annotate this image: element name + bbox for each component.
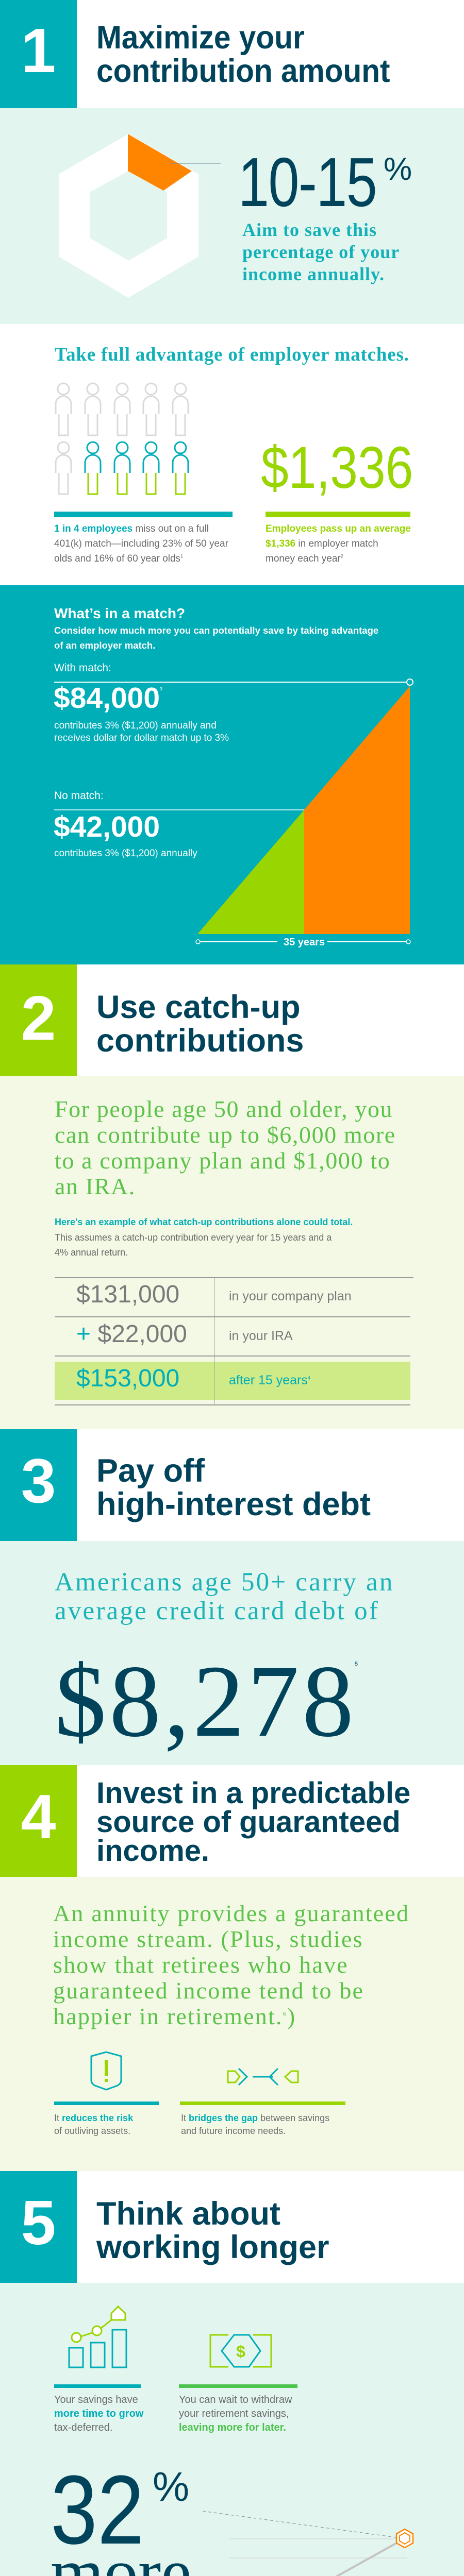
text: no match detail: contributes 3% ($1,200) annually	[54, 848, 197, 859]
panel: 10-15%	[0, 108, 464, 324]
number badge 2: 2	[21, 983, 56, 1053]
text: employees pass up: Employees pass up an average	[266, 523, 411, 534]
row: total: $153,000	[76, 1365, 179, 1392]
text: catch-up intro: an IRA.	[55, 1173, 136, 1199]
text: assumption: 4% annual return.	[55, 1247, 128, 1258]
percent sign: %	[384, 151, 412, 187]
panel: section 5 header	[0, 2171, 329, 2283]
number badge 5: 5	[21, 2188, 56, 2258]
bar: lime	[180, 2102, 345, 2105]
icon: people grid	[55, 382, 189, 495]
text: annuity: income stream. (Plus, studies	[53, 1926, 363, 1952]
subtitle	[54, 625, 378, 651]
text: reduces risk: It reduces the risk	[54, 2113, 133, 2123]
heading: invest: Invest in a predictable	[96, 1776, 410, 1810]
heading: take full advantage: Take full advantage of employer matches.	[55, 344, 409, 365]
row: IRA: + $22,000	[76, 1320, 187, 1348]
bar: teal	[54, 512, 233, 517]
icon: money	[209, 2334, 272, 2368]
text: annuity: An annuity provides a guaranteed	[53, 1900, 409, 1926]
number badge 5	[0, 2171, 77, 2283]
panel: credit card debt	[0, 1541, 464, 1765]
text: employees pass up: money each year2	[266, 553, 343, 564]
text: with match detail	[54, 720, 229, 743]
label: no match: No match:	[54, 790, 104, 802]
text: time to grow	[54, 2394, 143, 2433]
text: time to grow: tax-deferred.	[54, 2422, 112, 2433]
number badge 3: 3	[21, 1446, 56, 1516]
bar: teal	[54, 2102, 159, 2105]
text: wait to withdraw: You can wait to withdraw	[179, 2394, 292, 2405]
panel: section 4 header	[0, 1765, 410, 1877]
heading: catch-up: contributions	[96, 1023, 304, 1059]
text: employees pass up: $1,336 in employer match	[266, 538, 378, 549]
icon: hexagon chart	[59, 134, 221, 298]
text: bridges gap	[181, 2113, 329, 2136]
heading: invest	[96, 1776, 410, 1868]
text: catch-up intro: For people age 50 and older, you	[55, 1096, 393, 1122]
percent sign: %	[153, 2464, 189, 2510]
text: bridges gap: and future income needs.	[181, 2126, 286, 2136]
text: annuity: guaranteed income tend to be	[53, 1977, 364, 2004]
caption: aim to save: income annually.	[242, 264, 385, 284]
text: with match detail: receives dollar for dollar match up to 3%	[54, 733, 229, 743]
value: $42,000: $42,000	[54, 810, 160, 843]
caption: aim to save	[242, 219, 400, 284]
subtitle: Consider how much more you can potentially save by taking advantage	[54, 625, 378, 636]
table: totals	[55, 1277, 413, 1405]
panel: section 1 header	[0, 0, 464, 108]
text: with match detail: contributes 3% ($1,200) annually and	[54, 720, 217, 731]
text: 1 in 4 employees: 401(k) match—including 23% of 50 year	[54, 538, 228, 549]
heading: invest: income.	[96, 1834, 209, 1868]
panel: section 2 header	[0, 964, 304, 1076]
text: bridges gap: It bridges the gap between savings	[181, 2113, 329, 2123]
text: annuity	[53, 1900, 409, 2029]
heading: what's in a match: What’s in a match?	[54, 605, 185, 621]
value: $84,000: $84,0003	[54, 682, 162, 715]
big number $1,336: $1,336	[261, 435, 413, 501]
heading: pay off debt	[96, 1453, 371, 1522]
panel: annuity	[0, 1877, 464, 2171]
number badge 4: 4	[21, 1782, 56, 1852]
text: reduces risk: of outliving assets.	[54, 2126, 130, 2136]
row: company plan: $131,000	[76, 1281, 179, 1308]
text: time to grow: more time to grow	[54, 2408, 143, 2419]
icon: money: $	[236, 2342, 245, 2361]
heading: pay off debt: Pay off	[96, 1453, 205, 1489]
text: wait to withdraw	[179, 2394, 292, 2433]
subtitle: of an employer match.	[54, 640, 155, 651]
heading: maximize: contribution amount	[96, 53, 390, 89]
big number $8,278: $8,278	[55, 1645, 357, 1758]
icon: bridge arrows	[227, 2068, 299, 2086]
number badge 4	[0, 1765, 77, 1877]
chart: match triangle: 35 years	[284, 937, 325, 948]
chart: match triangle	[54, 679, 413, 948]
heading: catch-up: Use catch-up	[96, 989, 301, 1025]
panel: what's in a match	[0, 585, 464, 964]
label: with match: With match:	[54, 662, 111, 674]
text: 1 in 4 employees: 1 in 4 employees miss out on a full	[54, 523, 209, 534]
text: wait to withdraw: leaving more for later.	[179, 2422, 286, 2433]
heading: working longer: Think about	[96, 2196, 280, 2232]
heading: maximize: Maximize your	[96, 20, 305, 56]
text: assumption	[55, 1232, 332, 1258]
table: totals: in your IRA	[229, 1329, 293, 1343]
text: catch-up intro	[55, 1096, 396, 1199]
text: assumption: This assumes a catch-up contribution every year for 15 years and a	[55, 1232, 332, 1243]
icon: growth chart	[68, 2305, 127, 2368]
text: reduces risk	[54, 2113, 133, 2136]
table: totals: in your company plan	[229, 1289, 352, 1303]
heading: catch-up	[96, 989, 304, 1059]
number badge 1	[0, 0, 77, 108]
panel: employer matches	[54, 344, 413, 564]
text: americans age 50+: Americans age 50+ carry an	[55, 1568, 394, 1597]
number badge 3	[0, 1429, 77, 1541]
heading: invest: source of guaranteed	[96, 1805, 401, 1839]
caption: aim to save: Aim to save this	[242, 219, 377, 240]
text: time to grow: Your savings have	[54, 2394, 138, 2405]
footnote 5: 5	[355, 1661, 358, 1667]
chart: age line	[203, 2511, 413, 2576]
text: americans age 50+: average credit card debt of	[55, 1597, 379, 1625]
panel: working longer	[0, 2283, 464, 2576]
heading: working longer	[96, 2196, 329, 2265]
text: example heading: Here's an example of what catch-up contributions alone could total.	[55, 1217, 353, 1227]
text: employees pass up	[266, 523, 411, 564]
big number 10-15%: 10-15	[238, 143, 376, 221]
bar: teal	[54, 2384, 141, 2388]
text: catch-up intro: can contribute up to $6,000 more	[55, 1122, 396, 1148]
panel: section 3 header	[0, 1429, 371, 1541]
panel: catch-up content	[0, 1076, 464, 1429]
caption: aim to save: percentage of your	[242, 242, 400, 262]
text: catch-up intro: to a company plan and $1,000 to	[55, 1147, 390, 1174]
text: wait to withdraw: your retirement savings,	[179, 2408, 289, 2419]
text: annuity: show that retirees who have	[53, 1952, 349, 1978]
heading: maximize	[96, 20, 390, 89]
icon: shield	[91, 2052, 122, 2091]
bar: green	[179, 2384, 297, 2388]
number badge 2	[0, 964, 77, 1076]
text: 1 in 4 employees: olds and 16% of 60 year olds1	[54, 553, 183, 564]
table: totals: after 15 years4	[229, 1373, 310, 1387]
heading: pay off debt: high-interest debt	[96, 1486, 371, 1522]
text: 1 in 4 employees	[54, 523, 228, 564]
text: americans age 50+	[55, 1568, 394, 1625]
heading: working longer: working longer	[96, 2229, 329, 2265]
text: annuity: happier in retirement.6)	[53, 2003, 296, 2029]
bar: lime	[266, 512, 410, 517]
number badge 1: 1	[21, 15, 56, 86]
big number 32%: 32	[51, 2455, 144, 2565]
